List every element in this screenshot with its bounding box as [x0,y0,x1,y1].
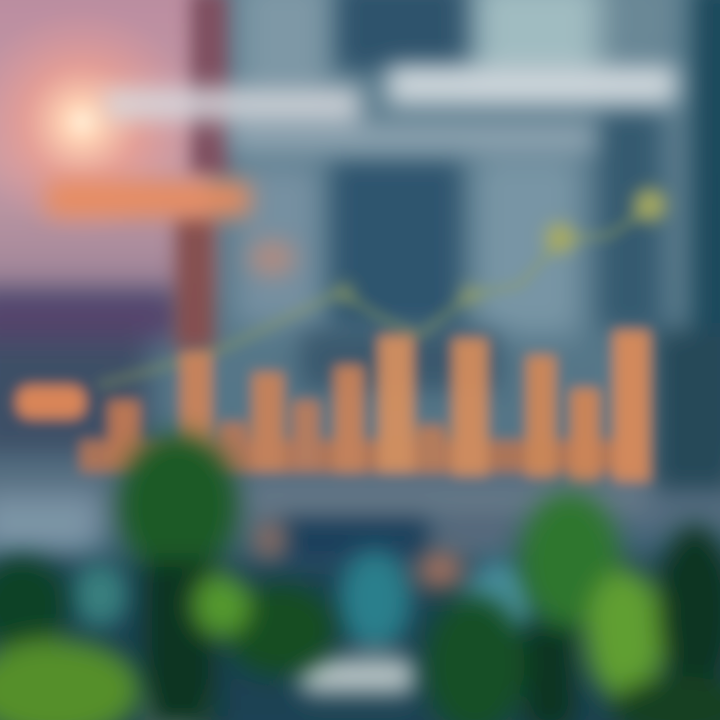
building: light towers [235,0,675,335]
light bands: horizontal beams [105,66,676,152]
background: sunset sky [0,0,210,295]
plant: right large [425,492,720,720]
line chart: green trend line [100,207,650,385]
bar chart: orange bars [16,330,650,482]
line chart: markers [336,189,666,305]
building: dark right towers [300,0,720,490]
building: dark central tower [332,0,463,325]
building: lower city band [0,465,720,560]
chart base band [80,440,650,472]
building: red-brown column [175,0,228,350]
legend pill [16,385,86,419]
plant: far left [0,557,140,720]
orange banner [46,182,250,216]
dark base strip beneath chart [250,490,650,565]
background: dark lower ground [0,560,720,720]
central teal foliage and hands [72,522,535,720]
plant: left large [118,433,335,720]
sun glow [0,7,197,237]
orange blob small [248,240,296,276]
background: purple horizon [0,290,180,460]
